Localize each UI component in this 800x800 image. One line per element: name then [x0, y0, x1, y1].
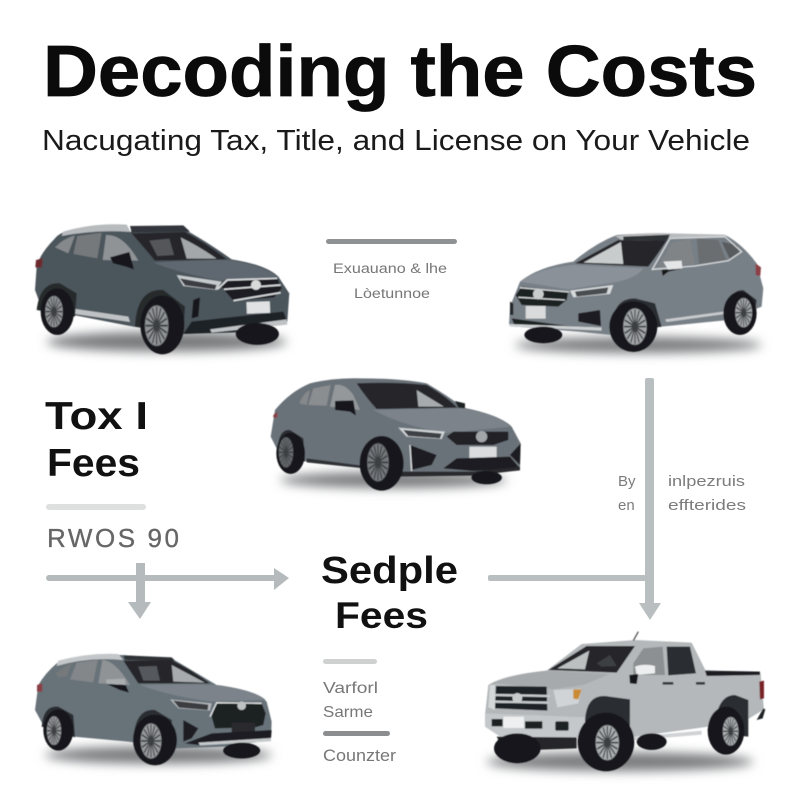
car: center sedan: [271, 378, 521, 491]
heading: Tox I Fees: Tox I: [45, 395, 148, 438]
title: Decoding the Costs: [43, 32, 757, 112]
text: Varforl Sarme: Sarme: [323, 704, 373, 721]
arrow: right elbow line: [488, 575, 646, 581]
text: right labels: inlpezruis: [668, 473, 745, 490]
bar: lower centre dark: [323, 731, 390, 736]
text: Varforl Sarme: [323, 680, 378, 721]
heading: Tox I Fees: Fees: [47, 442, 140, 485]
bar: under heading: [46, 504, 146, 510]
car: top-left SUV: [35, 224, 289, 354]
text: Varforl Sarme: Varforl: [323, 680, 378, 697]
heading: Tox I Fees: [45, 395, 148, 485]
bar: lower centre light: [323, 659, 377, 664]
heading: Sedple Fees: Fees: [335, 595, 428, 636]
text: right labels: en: [618, 497, 635, 514]
car: bottom-left SUV: [35, 654, 272, 765]
text: top centre: Lòetunnoe: [354, 286, 430, 301]
arrow: horizontal left: [46, 568, 289, 590]
text: top centre: [333, 261, 447, 301]
divider bar: top centre: [326, 239, 457, 244]
text: right labels: [618, 473, 746, 514]
subtitle: Nacugating Tax, Title, and License on Your Vehicle: [42, 125, 750, 157]
heading: Sedple Fees: Sedple: [321, 550, 458, 592]
car: top-right SUV: [509, 233, 763, 353]
text: top centre: Exuauano & lhe: [333, 261, 447, 276]
text: RWOS 90: RWOS 90: [47, 523, 179, 553]
text: right labels: By: [618, 473, 636, 490]
arrow: down left: [128, 563, 151, 619]
text: right labels: effterides: [668, 497, 746, 514]
car: pickup truck: [485, 632, 765, 771]
arrow: right vertical down: [639, 378, 661, 620]
heading: Sedple Fees: [321, 550, 458, 636]
text: Counzter: Counzter: [323, 746, 396, 765]
